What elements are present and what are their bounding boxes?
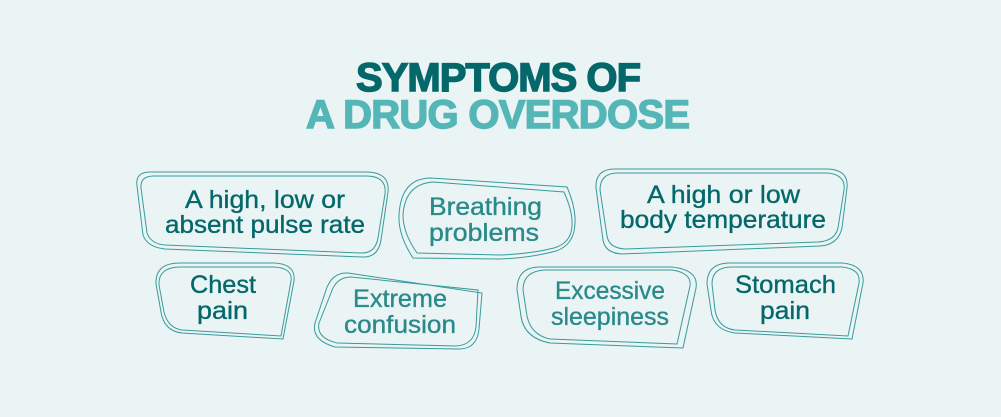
badge: chest pain: [156, 263, 294, 339]
badge: chest pain: pain: [197, 297, 248, 325]
badge: stomach pain: pain: [760, 297, 810, 325]
badge: breathing problems: [399, 178, 575, 259]
badge: extreme confusion: confusion: [344, 311, 456, 339]
badge: excessive sleepiness: sleepiness: [551, 303, 669, 331]
badge: extreme confusion: Extreme: [353, 285, 447, 313]
badge: breathing problems: Breathing: [429, 193, 542, 221]
badge: body temperature: body temperature: [620, 206, 826, 234]
badge: extreme confusion: [314, 273, 482, 349]
badge: chest pain: Chest: [190, 271, 256, 299]
badge: excessive sleepiness: [517, 267, 696, 348]
title line 2: A DRUG OVERDOSE: [306, 93, 690, 137]
badge: excessive sleepiness: Excessive: [555, 277, 665, 305]
badge: body temperature: [596, 169, 847, 254]
badge: pulse rate: A high, low or: [185, 186, 345, 214]
badge: pulse rate: [137, 172, 388, 257]
badge: stomach pain: [707, 263, 863, 339]
title line 1: SYMPTOMS OF: [356, 56, 641, 100]
badge: breathing problems: problems: [429, 219, 539, 247]
badge: stomach pain: Stomach: [735, 271, 836, 299]
badge: body temperature: A high or low: [647, 181, 801, 209]
title: [306, 56, 690, 137]
badge: pulse rate: absent pulse rate: [165, 211, 365, 239]
